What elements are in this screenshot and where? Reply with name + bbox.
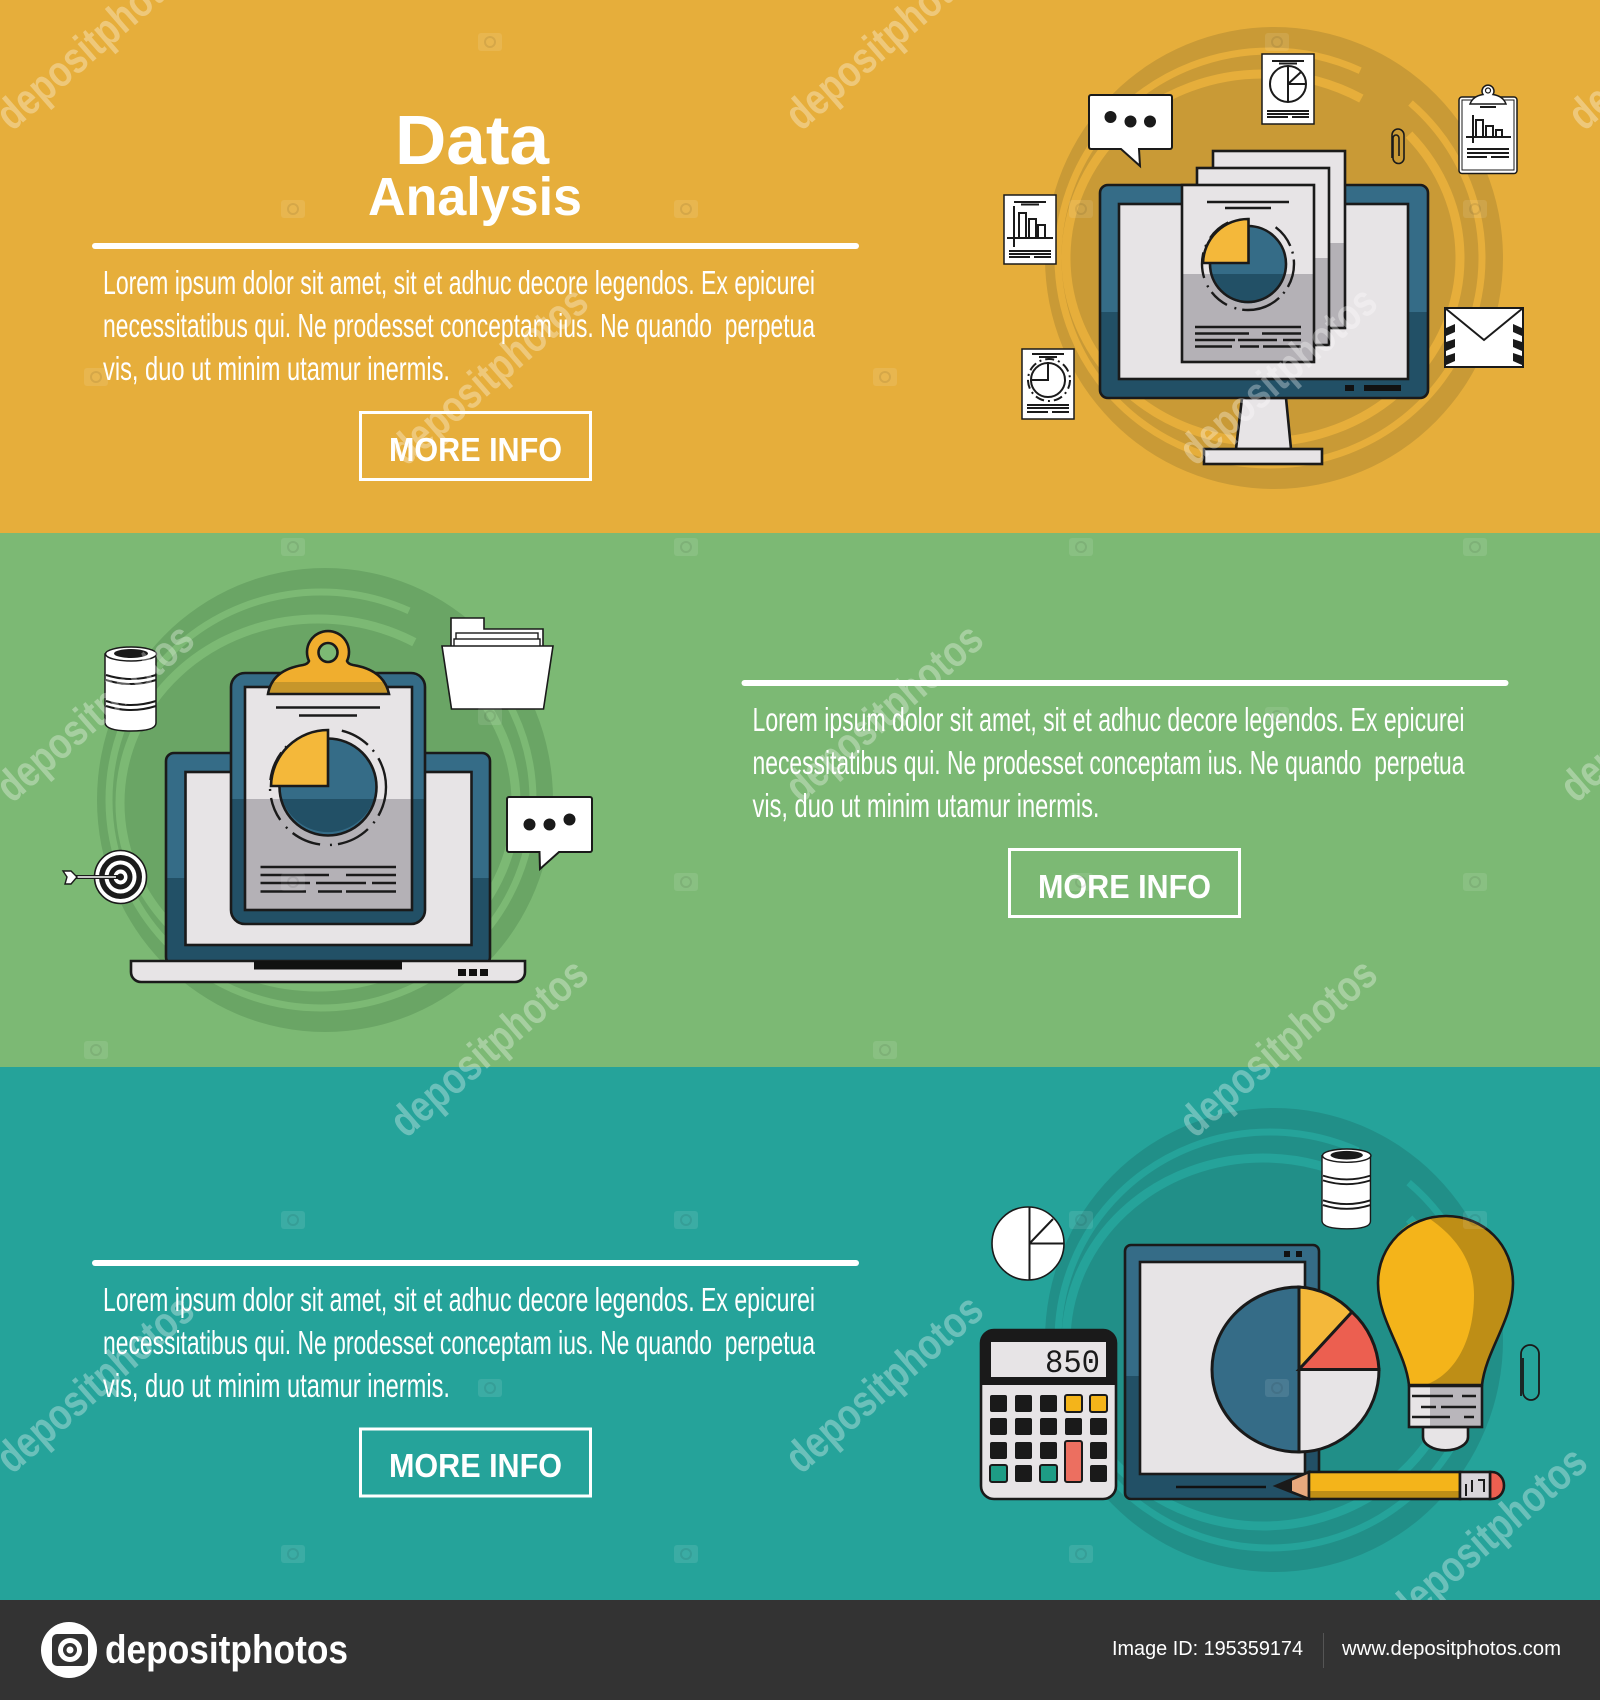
body text <box>103 1281 815 1404</box>
button: more info: MORE INFO <box>1038 868 1211 905</box>
body text: necessitatibus qui. Ne prodesset conceptam ius. Ne quando perpetua <box>103 307 815 344</box>
title: Data <box>395 101 550 179</box>
body text: vis, duo ut minim utamur inermis. <box>752 787 1100 824</box>
icon: clipboard with bar chart <box>1459 85 1517 174</box>
chart: pie on report <box>1202 218 1294 310</box>
icon: light bulb <box>1378 1216 1513 1450</box>
icon: speech bubble <box>507 797 592 869</box>
panel: green banner <box>0 533 1600 1067</box>
icon: desktop monitor with reports <box>1100 151 1428 464</box>
background rings <box>1045 27 1503 489</box>
website: www.depositphotos.com <box>1341 1638 1561 1660</box>
icon: calculator: 850 <box>1045 1345 1100 1382</box>
button: more info <box>360 412 590 480</box>
icon: pie chart document <box>1262 54 1314 124</box>
watermarks: depositphotos <box>775 614 992 812</box>
title: Analysis <box>368 167 582 227</box>
icon: clipboard clip <box>268 631 389 694</box>
icon: calculator <box>981 1330 1116 1499</box>
panel: teal banner <box>0 1067 1600 1600</box>
image id: Image ID: 195359174 <box>1112 1638 1303 1660</box>
chart: pie on clipboard <box>270 729 386 845</box>
body text: vis, duo ut minim utamur inermis. <box>103 1367 450 1404</box>
button: more info: MORE INFO <box>389 431 562 468</box>
watermarks: depositphotos <box>380 277 597 475</box>
icon: laptop with clipboard <box>131 631 525 982</box>
chart: large pie <box>1212 1287 1379 1452</box>
background rings <box>97 568 553 1032</box>
icon: database cylinder <box>1322 1149 1371 1229</box>
calculator keys <box>990 1395 1107 1482</box>
icon: folder <box>442 618 553 709</box>
watermarks: depositphotos <box>1169 949 1386 1147</box>
brand name: depositphotos <box>105 1628 348 1672</box>
divider line <box>742 680 1508 686</box>
icon: pencil <box>1276 1472 1504 1499</box>
body text <box>103 264 815 387</box>
watermarks: depositphotos <box>380 949 597 1147</box>
footer bar <box>0 1600 1600 1700</box>
watermarks: depositphotos <box>1169 277 1386 475</box>
button: more info <box>360 1429 590 1496</box>
body text: Lorem ipsum dolor sit amet, sit et adhuc decore legendos. Ex epicurei <box>103 1281 815 1318</box>
button: more info <box>1010 850 1240 916</box>
icon: bar chart document <box>1004 195 1056 264</box>
icon: speech bubble <box>1089 95 1172 166</box>
icon: database cylinder <box>105 647 156 731</box>
body text <box>752 701 1465 824</box>
divider line <box>92 243 859 249</box>
button: more info: MORE INFO <box>389 1447 562 1484</box>
icon: depositphotos logo <box>41 1622 97 1678</box>
title <box>368 101 582 227</box>
body text: necessitatibus qui. Ne prodesset conceptam ius. Ne quando perpetua <box>103 1324 815 1361</box>
divider line <box>92 1260 859 1266</box>
icon: paperclip <box>1392 129 1404 164</box>
icon: target with arrow <box>63 850 146 904</box>
icon: small pie <box>992 1207 1064 1280</box>
watermarks: depositphotos <box>775 1285 992 1483</box>
icon: pie report document <box>1022 349 1074 419</box>
panel: yellow banner <box>0 0 1600 533</box>
icon: envelope <box>1445 308 1523 367</box>
body text: Lorem ipsum dolor sit amet, sit et adhuc decore legendos. Ex epicurei <box>103 264 815 301</box>
icon: tablet with pie chart <box>1125 1245 1379 1499</box>
icon: paperclip <box>1521 1345 1539 1400</box>
body text: vis, duo ut minim utamur inermis. <box>103 350 450 387</box>
background rings <box>1045 1108 1503 1572</box>
